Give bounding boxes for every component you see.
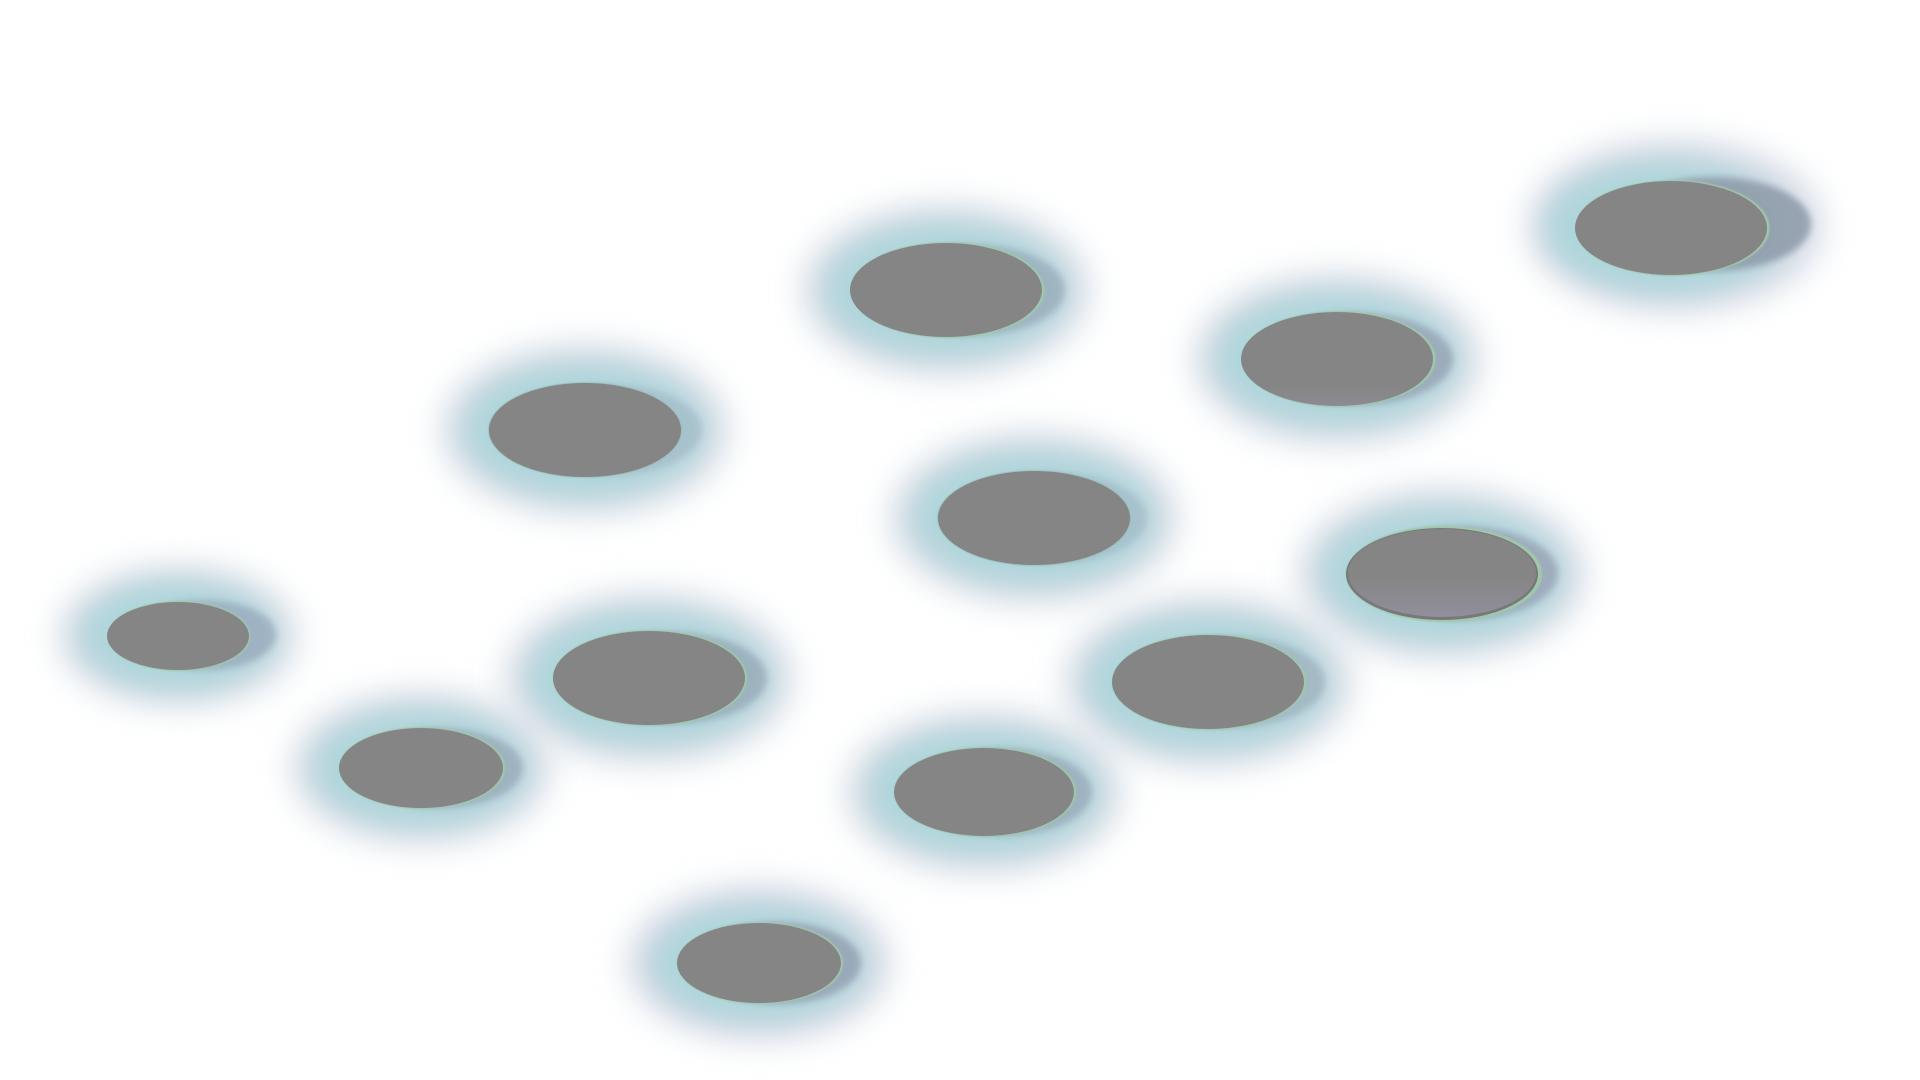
- spot 8: [507, 594, 791, 762]
- spot 4: [443, 346, 727, 514]
- spot 11: [848, 712, 1120, 872]
- spot 10: [293, 693, 549, 843]
- spot 6: [1300, 490, 1584, 658]
- spot 5: [892, 434, 1176, 602]
- spot 3: [1529, 142, 1821, 310]
- spot 1: [804, 206, 1088, 374]
- spot 9: [1066, 598, 1350, 766]
- spot 12: [629, 887, 889, 1039]
- spot 7: [60, 567, 296, 705]
- spot 2: [1195, 275, 1479, 443]
